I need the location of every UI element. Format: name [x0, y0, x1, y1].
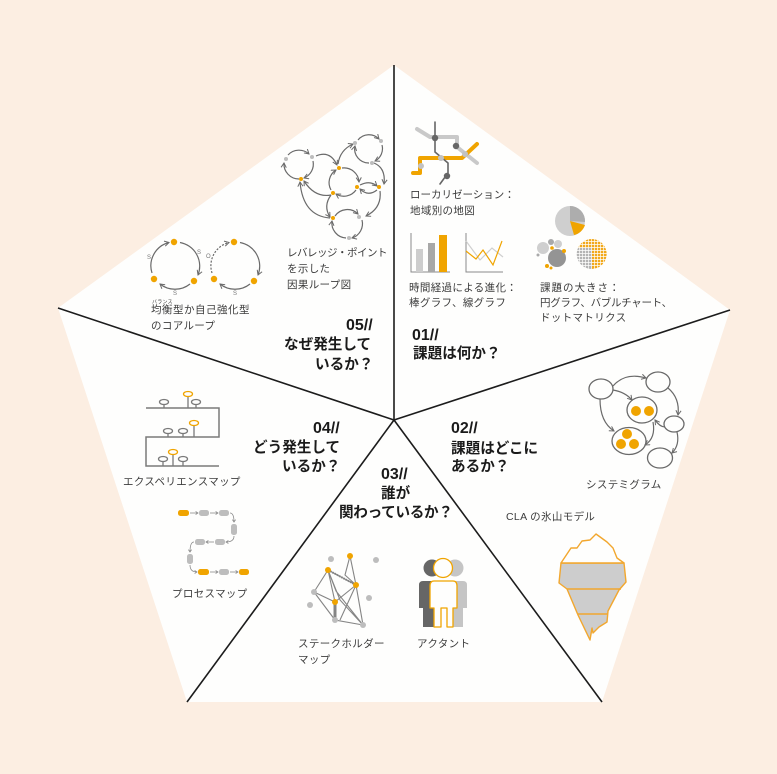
panel: 01 what is the issue: [409, 122, 672, 362]
heading: 02: 02//: [451, 420, 478, 437]
icon: system diagram: [589, 372, 684, 468]
label: stakeholder map: マップ: [298, 654, 331, 666]
icon: reinforcing core loop: S: [233, 291, 237, 297]
pentagon panel: [58, 65, 730, 702]
heading: 05: いるか？: [315, 356, 373, 373]
icon: pie chart: [555, 206, 585, 236]
label: evolution over time: 棒グラフ、線グラフ: [409, 296, 506, 309]
heading: 01: 課題は何か？: [413, 344, 501, 362]
heading: 03: 関わっているか？: [339, 504, 453, 521]
pentagon dividers: [58, 65, 730, 702]
panel: 05 why does it occur: [147, 135, 387, 373]
icon: dot matrix: [576, 237, 608, 270]
heading: 03: 03//: [381, 466, 408, 483]
icon: bar chart: [411, 233, 450, 272]
heading: 05: なぜ発生して: [284, 335, 371, 353]
label: causal loop diagram: 因果ループ図: [287, 279, 351, 291]
icon: balancing core loop: S: [147, 255, 151, 261]
label: core loop: のコアループ: [151, 320, 216, 332]
label: localisation: ローカリゼーション：: [410, 189, 515, 201]
label: CLA iceberg: CLA の氷山モデル: [506, 510, 595, 523]
heading: 04: いるか？: [282, 458, 340, 475]
heading: 04: 04//: [313, 420, 340, 437]
icon: stakeholder map: [307, 553, 379, 628]
label: core loop: バランス: [152, 300, 173, 306]
heading: 03: 誰が: [381, 484, 411, 502]
panel: 04 how does it occur: [123, 392, 340, 600]
icon: balancing core loop: S: [173, 291, 177, 297]
icon: balancing core loop: [147, 239, 201, 297]
label: system diagram: システミグラム: [586, 478, 662, 491]
heading: 02: 課題はどこに: [451, 440, 538, 457]
heading: 01: 01//: [412, 327, 439, 344]
panel: 02 where is the issue: [506, 372, 684, 640]
label: experience map: エクスペリエンスマップ: [123, 476, 241, 488]
icon: causal loop diagram: [284, 135, 384, 240]
label: stakeholder map: ステークホルダー: [298, 637, 385, 650]
heading: 02: あるか？: [451, 458, 509, 475]
label: localisation: 地域別の地図: [410, 204, 475, 217]
label: core loop: 均衡型か自己強化型: [151, 303, 250, 316]
panel: 03 who is involved: [298, 466, 470, 666]
icon: balancing core loop: S: [197, 250, 201, 256]
label: size of issue: ドットマトリクス: [540, 312, 626, 324]
icon: iceberg: [559, 534, 626, 640]
label: size of issue: 円グラフ、バブルチャート、: [540, 296, 672, 309]
icon: reinforcing core loop: O: [206, 254, 211, 260]
label: causal loop diagram: レバレッジ・ポイント: [287, 247, 387, 259]
label: causal loop diagram: を示した: [287, 263, 330, 275]
icon: process map: [178, 510, 249, 575]
icon: line chart: [466, 233, 503, 272]
icon: reinforcing core loop: [206, 239, 260, 297]
label: size of issue: 課題の大きさ：: [540, 281, 620, 294]
icon: actant figures: [419, 558, 467, 627]
label: actant: アクタント: [417, 638, 470, 650]
icon: localisation metro map: [413, 122, 477, 184]
heading: 05: 05//: [346, 317, 373, 334]
label: process map: プロセスマップ: [172, 588, 248, 600]
icon: experience map: [146, 392, 219, 466]
label: evolution over time: 時間経過による進化：: [409, 281, 517, 294]
heading: 04: どう発生して: [253, 438, 340, 456]
icon: bubble chart: [536, 239, 566, 270]
